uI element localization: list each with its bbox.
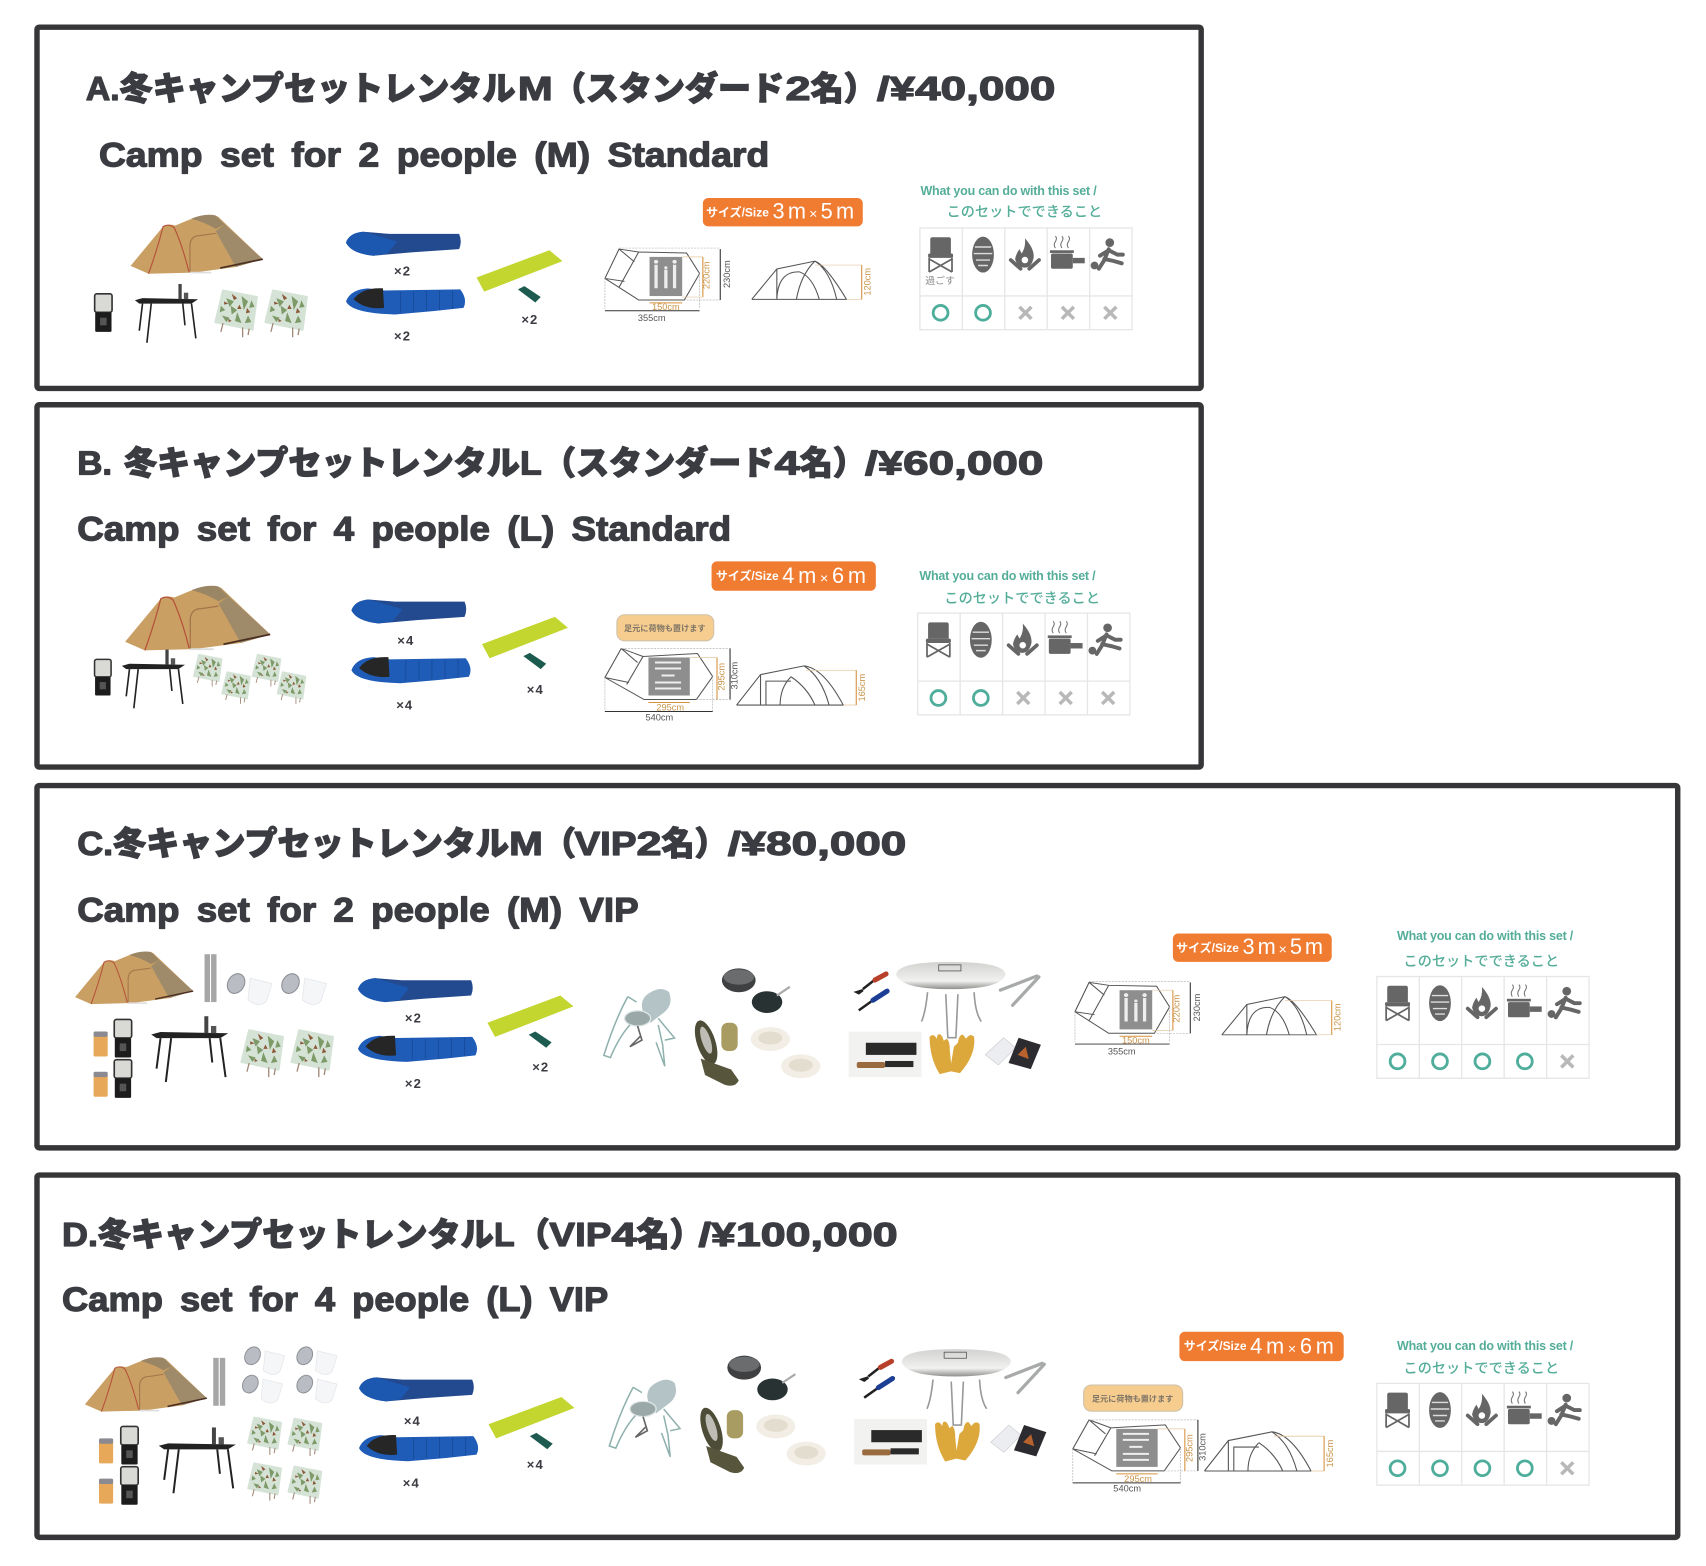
icon: mummy sleeping bag	[346, 288, 465, 314]
icon: carpet poles	[213, 1358, 225, 1406]
icon: fire pit and tools	[854, 1349, 1046, 1464]
panel: set C	[37, 786, 1678, 1148]
heading: set D Japanese title and price: 名）	[636, 1217, 703, 1254]
heading: set C Japanese title and price: （	[543, 826, 576, 863]
icon: table	[159, 1427, 236, 1493]
activities heading: What you can do with this set /	[1397, 1339, 1574, 1353]
tent floor plan: 310cm	[730, 662, 740, 690]
size badge: 3 m × 5 m	[1243, 934, 1323, 959]
icon: four camp chairs	[194, 655, 306, 704]
quantity label: ×4	[404, 1413, 421, 1428]
tent floor plan: 310cm	[1198, 1433, 1208, 1461]
quantity label: ×2	[405, 1076, 422, 1091]
activities heading	[1397, 1339, 1574, 1376]
size badge: サイズ/Size	[1184, 1338, 1247, 1353]
heading: set D Japanese title and price: VIP	[549, 1217, 611, 1254]
icon: gas burner	[604, 989, 675, 1066]
tent floor plan: 230cm	[722, 260, 732, 288]
quantity label: ×2	[521, 312, 538, 327]
quantity label: ×2	[405, 1011, 422, 1026]
tent floor plan: 295cm	[656, 702, 684, 712]
activities heading: What you can do with this set /	[920, 184, 1097, 198]
panel: set D	[37, 1175, 1678, 1537]
icon: lantern	[95, 659, 111, 696]
icon: sleeping mat	[489, 1397, 574, 1449]
heading: set B Japanese title and price: （スタンダード	[543, 444, 774, 482]
panel: set B	[37, 405, 1201, 767]
note bubble	[617, 615, 714, 641]
size badge: 4 m × 6 m	[782, 563, 866, 588]
icon: cookware, cutlery and bowls	[696, 1356, 826, 1473]
tent side view: 165cm	[1325, 1439, 1335, 1467]
heading: set B English title: Camp set for 4 people (L) Standard	[77, 511, 731, 549]
activities heading	[919, 569, 1100, 606]
icon: dome tent	[85, 1357, 207, 1412]
tent side view	[1222, 997, 1342, 1035]
icon: fire pit and tools	[849, 962, 1041, 1077]
heading: set A Japanese title and price: 名）	[811, 71, 877, 108]
icon: two camp chairs	[215, 291, 307, 337]
icon: table	[135, 284, 198, 343]
tent side view: 165cm	[857, 673, 867, 701]
heading: set D Japanese title and price: （	[517, 1217, 550, 1254]
tent floor plan: 295cm	[1124, 1474, 1152, 1484]
activities grid	[919, 227, 1132, 330]
quantity label: ×4	[396, 697, 413, 712]
tent floor plan: 150cm	[652, 302, 680, 312]
heading: set A Japanese title and price: 冬キャンプセットレンタル	[120, 71, 515, 108]
tent floor plan	[605, 248, 732, 323]
icon: mummy sleeping bag	[359, 1435, 478, 1461]
heading: set C Japanese title and price: /¥80,000	[728, 826, 906, 863]
quantity label: ×4	[397, 633, 414, 648]
heading: set B Japanese title and price: B.	[77, 445, 112, 482]
tent side view	[737, 666, 867, 705]
heading: set C English title: Camp set for 2 people (M) VIP	[77, 892, 639, 930]
heading: set C Japanese title and price: M	[509, 826, 543, 863]
activities grid	[1376, 1383, 1589, 1485]
icon: two camp chairs	[242, 1030, 333, 1077]
activities heading: What you can do with this set /	[1397, 929, 1574, 943]
icon: envelope sleeping bag	[358, 978, 473, 1002]
quantity label: ×2	[394, 329, 411, 344]
heading: set B Japanese title and price: 4	[775, 445, 801, 482]
icon: carpet poles	[205, 954, 217, 1002]
size badge	[712, 561, 876, 591]
icon: gas burner	[609, 1380, 680, 1457]
quantity label: ×2	[394, 263, 411, 278]
heading: set C Japanese title and price: 2	[636, 826, 662, 863]
activities grid: 過ごす	[925, 274, 955, 287]
size badge: サイズ/Size	[1176, 940, 1239, 955]
size badge	[1173, 934, 1332, 962]
tent floor plan: 540cm	[645, 712, 673, 722]
heading: set C Japanese title and price: 名）	[662, 826, 728, 863]
note bubble	[1084, 1385, 1183, 1411]
tent side view: 120cm	[1332, 1003, 1342, 1031]
quantity label: ×4	[527, 1457, 544, 1472]
heading: set B Japanese title and price: /¥60,000	[865, 445, 1043, 482]
heading: set D Japanese title and price: 冬キャンプセットレンタル	[98, 1217, 494, 1254]
icon: sleeping mat	[477, 250, 563, 302]
icon: batteries and lanterns	[99, 1426, 138, 1505]
icon: table	[122, 650, 185, 708]
heading: set A Japanese title and price: M	[518, 71, 553, 108]
icon: dome tent	[75, 951, 193, 1004]
tent side view	[752, 261, 872, 299]
activities heading: What you can do with this set /	[919, 569, 1096, 583]
heading: set D English title: Camp set for 4 people (L) VIP	[62, 1281, 608, 1319]
heading: set B Japanese title and price: L	[520, 445, 542, 482]
activities heading	[1397, 929, 1574, 969]
note bubble: 足元に荷物も置けます	[1092, 1393, 1173, 1403]
icon: mummy sleeping bag	[351, 657, 471, 683]
tent floor plan: 150cm	[1122, 1035, 1150, 1045]
heading: set D Japanese title and price: 4	[611, 1217, 637, 1254]
heading: set D Japanese title and price: D.	[62, 1217, 98, 1254]
size badge: サイズ/Size	[716, 568, 779, 583]
note bubble: 足元に荷物も置けます	[624, 623, 706, 633]
heading: set C Japanese title and price: 冬キャンプセットレンタル	[113, 826, 509, 863]
icon: cookware, cutlery and bowls	[690, 968, 820, 1086]
panel: set A	[37, 27, 1201, 388]
icon: four camp chairs	[248, 1417, 321, 1504]
tent side view	[1204, 1432, 1335, 1471]
icon: dome tent	[131, 215, 263, 274]
tent floor plan: 230cm	[1192, 993, 1202, 1021]
tent floor plan	[1073, 1420, 1208, 1494]
tent floor plan	[605, 648, 740, 722]
icon: two heaters with covers	[224, 971, 326, 1005]
icon: dome tent	[125, 586, 270, 650]
activities heading	[920, 184, 1102, 220]
tent side view: 120cm	[862, 268, 872, 296]
size badge: 3 m × 5 m	[772, 199, 854, 224]
heading: set B Japanese title and price: 冬キャンプセットレンタル	[124, 445, 520, 482]
heading: set A English title: Camp set for 2 people (M) Standard	[99, 136, 769, 174]
icon: table	[151, 1016, 228, 1082]
heading: set A Japanese title and price: （スタンダード	[553, 70, 784, 108]
activities heading: このセットでできること	[944, 590, 1100, 606]
icon: sleeping mat	[487, 996, 573, 1048]
size badge: 4 m × 6 m	[1250, 1333, 1334, 1358]
icon: envelope sleeping bag	[359, 1377, 474, 1401]
quantity label: ×4	[527, 682, 544, 697]
heading: set C Japanese title and price: C.	[77, 826, 113, 863]
tent floor plan	[1075, 981, 1202, 1056]
tent floor plan: 540cm	[1113, 1484, 1141, 1494]
activities heading: このセットでできること	[1404, 953, 1559, 969]
tent floor plan: 355cm	[1108, 1046, 1136, 1056]
quantity label: ×4	[403, 1475, 420, 1490]
heading: set A Japanese title and price: 2	[786, 71, 811, 108]
quantity label: ×2	[532, 1060, 549, 1075]
icon: sleeping mat	[482, 617, 568, 669]
heading: set D Japanese title and price: /¥100,000	[699, 1217, 898, 1254]
heading: set A Japanese title and price: A.	[86, 71, 120, 108]
heading: set C Japanese title and price: VIP	[574, 826, 636, 863]
icon: lantern	[95, 294, 112, 332]
icon: envelope sleeping bag	[346, 232, 461, 256]
activities heading: このセットでできること	[1404, 1360, 1559, 1376]
tent floor plan: 220cm	[1171, 994, 1181, 1022]
activities heading: このセットでできること	[947, 204, 1102, 220]
tent floor plan: 295cm	[717, 663, 727, 691]
activities grid	[1376, 976, 1589, 1078]
icon: mummy sleeping bag	[358, 1036, 477, 1062]
activities grid	[917, 613, 1130, 715]
size badge: サイズ/Size	[706, 205, 769, 220]
tent floor plan: 220cm	[701, 261, 711, 289]
icon: four heaters with covers	[239, 1344, 337, 1403]
tent floor plan: 355cm	[638, 313, 666, 323]
heading: set D Japanese title and price: L	[494, 1217, 515, 1254]
size badge	[1179, 1332, 1344, 1361]
heading: set B Japanese title and price: 名）	[800, 445, 866, 482]
heading: set A Japanese title and price: /¥40,000	[877, 71, 1055, 108]
icon: batteries and lanterns	[94, 1019, 132, 1098]
tent floor plan: 295cm	[1184, 1434, 1194, 1462]
icon: envelope sleeping bag	[351, 600, 466, 623]
size badge	[703, 198, 863, 226]
